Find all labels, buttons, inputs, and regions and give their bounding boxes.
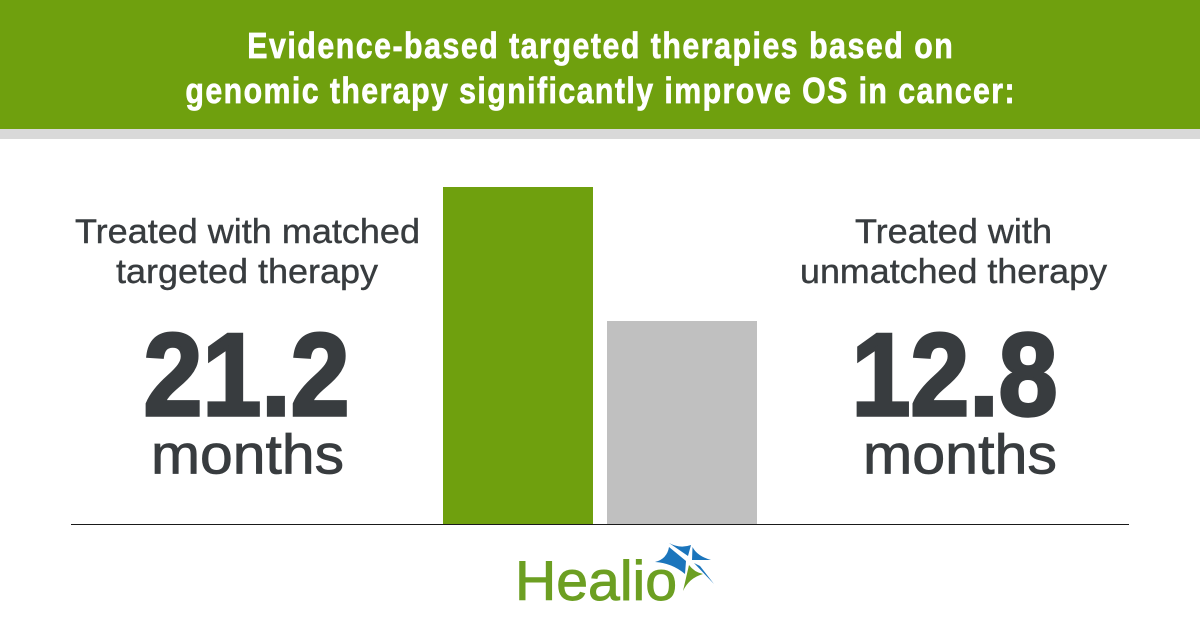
logo wordmark: Healio xyxy=(515,549,677,612)
baseline xyxy=(71,524,1129,525)
bar: matched targeted therapy xyxy=(443,187,593,524)
header banner xyxy=(0,0,1200,139)
right value: 12.8 months: months xyxy=(863,422,1057,486)
right label: unmatched therapy xyxy=(800,213,1107,291)
bar chart xyxy=(71,187,1129,525)
icon: star xyxy=(655,543,714,591)
title: Evidence-based targeted therapies based on xyxy=(247,26,953,67)
right value: 12.8 months xyxy=(852,309,1058,486)
right value: 12.8 months: 12.8 xyxy=(852,309,1058,440)
right label: unmatched therapy: Treated with xyxy=(855,213,1052,251)
title: genomic therapy significantly improve OS in cancer: xyxy=(185,71,1015,112)
bar: unmatched therapy xyxy=(607,321,757,524)
right label: unmatched therapy: unmatched therapy xyxy=(800,253,1107,291)
left value: 21.2 months xyxy=(144,309,350,486)
left value: 21.2 months: 21.2 xyxy=(144,309,350,440)
Healio logo xyxy=(515,543,714,612)
left label: matched targeted therapy: targeted therapy xyxy=(116,253,378,291)
left value: 21.2 months: months xyxy=(151,422,344,486)
left label: matched targeted therapy xyxy=(75,213,420,291)
left label: matched targeted therapy: Treated with matched xyxy=(75,213,420,251)
title xyxy=(185,26,1015,112)
